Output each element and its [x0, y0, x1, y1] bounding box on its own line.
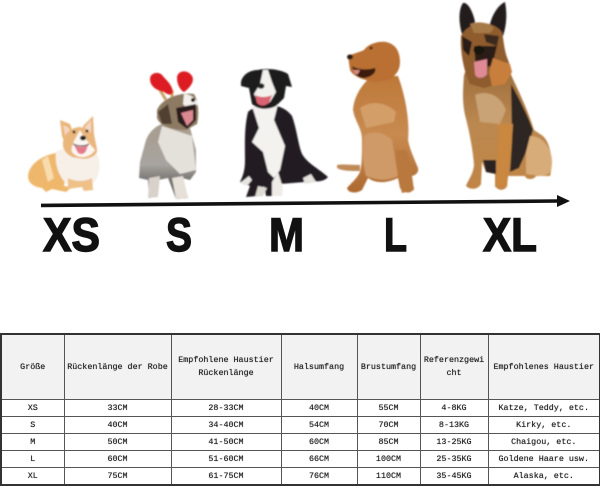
size chart table: 8-13KG	[439, 420, 469, 430]
size chart table: XL	[28, 470, 38, 480]
size chart table: 70CM	[378, 420, 399, 430]
size chart table: 25-35KG	[436, 454, 472, 464]
size chart table: 13-25KG	[436, 436, 472, 446]
size chart table: 75CM	[107, 470, 128, 480]
label: S: S	[166, 208, 192, 261]
size chart table: Empfohlene Haustier	[178, 355, 274, 365]
label: L: L	[384, 208, 407, 261]
size chart table: Empfohlenes Haustier	[493, 362, 594, 372]
icon: heart headband	[150, 71, 193, 95]
size chart table: Chaigou, etc.	[511, 436, 576, 446]
size chart table: 40CM	[107, 420, 128, 430]
size chart table: 100CM	[376, 454, 401, 464]
label: XL: XL	[483, 208, 537, 261]
size chart table: Goldene Haare usw.	[499, 454, 589, 464]
size chart table: Brustumfang	[361, 362, 416, 372]
size chart table	[0, 333, 600, 486]
size chart table: 50CM	[107, 436, 128, 446]
size chart table: 54CM	[309, 420, 329, 430]
size chart table: 66CM	[309, 454, 329, 464]
size chart table: Katze, Teddy, etc.	[499, 402, 589, 412]
size chart table: Rückenlänge der Robe	[67, 362, 168, 372]
size chart table: 55CM	[378, 402, 399, 412]
illustration: dogs by size with arrow	[27, 1, 570, 261]
size chart table: 51-60CM	[208, 454, 244, 464]
dog M: border collie	[240, 69, 328, 197]
label: M: M	[269, 208, 304, 261]
size chart table: 85CM	[378, 436, 399, 446]
dog L: golden retriever	[337, 42, 418, 193]
size chart table: 28-33CM	[208, 402, 244, 412]
size chart table: 34-40CM	[208, 420, 244, 430]
size chart table: 33CM	[107, 402, 128, 412]
dog XL: German shepherd	[460, 2, 552, 190]
size chart table: 60CM	[309, 436, 329, 446]
size chart table: 41-50CM	[208, 436, 244, 446]
size chart table: 4-8KG	[441, 402, 467, 412]
size chart table: 40CM	[309, 402, 329, 412]
size chart table: Alaska, etc.	[514, 470, 574, 480]
size chart table: cht	[446, 368, 462, 378]
size chart table: Referenzgewi	[424, 355, 484, 365]
dog XS: corgi	[28, 116, 100, 192]
size chart table: 76CM	[309, 470, 329, 480]
size chart table: Rückenlänge	[198, 368, 254, 378]
label: XS: XS	[43, 208, 100, 261]
size chart table: M	[30, 436, 35, 446]
size labels	[43, 208, 537, 261]
size chart table: Halsumfang	[294, 362, 344, 372]
size chart table: L	[30, 454, 35, 464]
size chart table: 110CM	[376, 470, 401, 480]
size chart table: S	[30, 420, 35, 430]
dog S: grey dog with heart headband	[139, 71, 198, 199]
size chart table: 60CM	[107, 454, 128, 464]
size chart table: XS	[28, 402, 38, 412]
size chart table: Größe	[20, 362, 45, 372]
size chart table: 61-75CM	[208, 470, 244, 480]
arrow: size axis	[41, 195, 570, 207]
size chart table: 35-45KG	[436, 470, 472, 480]
size chart table: Kirky, etc.	[516, 420, 571, 430]
